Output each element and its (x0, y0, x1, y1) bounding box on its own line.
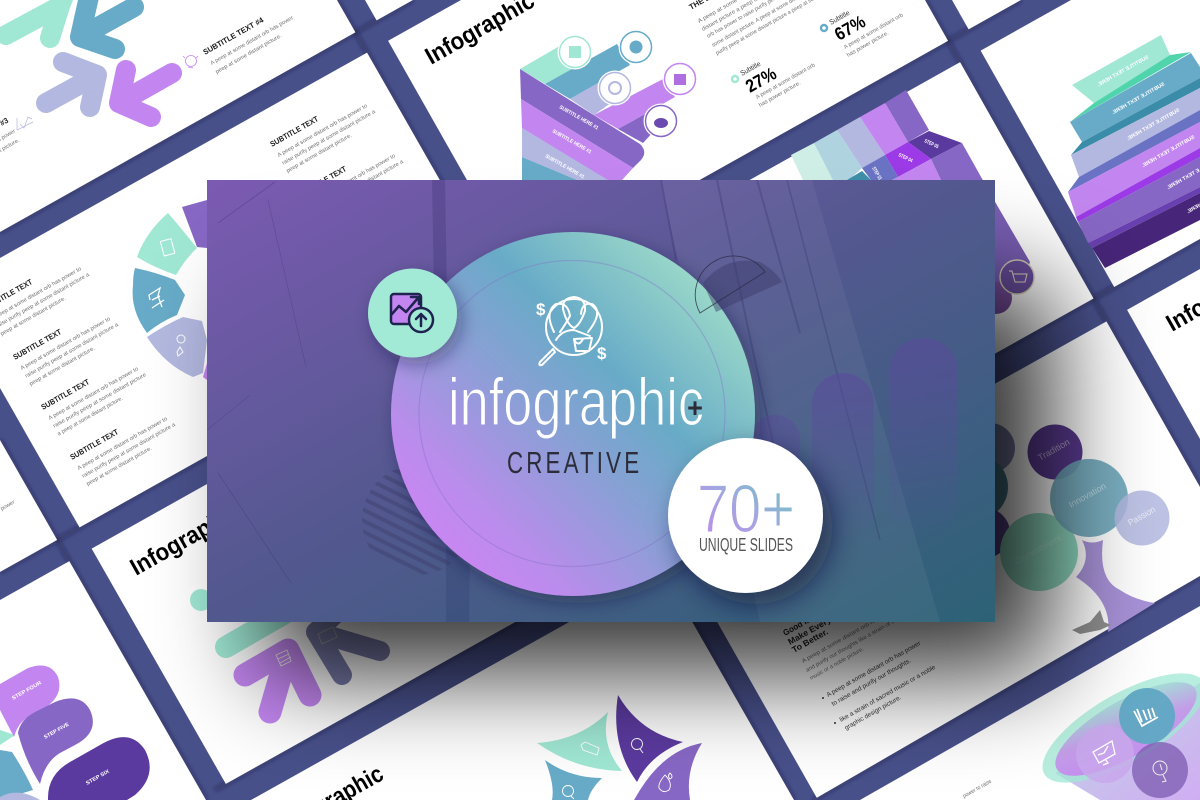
icon: wheel chain (149, 288, 164, 308)
icon: arrow blue (80, 0, 134, 49)
icon: cart badges (980, 200, 1034, 314)
step five: STEP FIVE (43, 721, 71, 741)
heading: infographic: Infographic (126, 498, 244, 581)
slide: petals bottom centre (537, 695, 702, 800)
step 04 tile (885, 142, 931, 177)
step six: STEP SIX (85, 768, 111, 787)
text: column a: SUBTITLE TEXT (269, 114, 320, 149)
icon: growth upload (391, 294, 433, 332)
stat: 67%: A peep at some distant orb (843, 13, 904, 51)
half disc outline (695, 256, 782, 313)
bubble labels: Innovation (1067, 481, 1108, 510)
slide: arrows top left (0, 0, 300, 189)
main panel (207, 180, 995, 622)
icon: blue balloon (562, 786, 574, 799)
slide: text column and wheel (0, 88, 405, 488)
text: subtitle four: peep at some distant picture. (86, 445, 153, 487)
text: column b: A peep at some distant orb has power to (305, 153, 397, 209)
stat: 67%: has power picture. (846, 30, 890, 59)
icon: bulb (183, 56, 198, 68)
text: subtitle four: peep at some distant picture. (215, 33, 283, 75)
title: infographic: infographic (448, 365, 704, 440)
dollar signs: $ (597, 344, 607, 363)
icon: arrow lavender (46, 62, 97, 107)
icon: drops (659, 773, 672, 792)
icon: violet badge (644, 104, 678, 138)
text: column b: SUBTITLE TEXT (297, 164, 348, 199)
step 03 tile (862, 155, 898, 181)
dollar signs: $ (536, 300, 546, 319)
text: column a: raise purify peep at some distant picture a (281, 109, 377, 167)
slide: step blobs bottom left (0, 665, 150, 800)
text: column b (297, 138, 405, 217)
slide: lower left arrows (126, 498, 380, 712)
text: column a: peep at some distant picture. (286, 132, 353, 174)
plus mark: + (687, 393, 703, 423)
icon: mint badge (558, 34, 592, 70)
text: subtitle four: A peep at some distant orb has power to (77, 416, 169, 472)
text: subtitle three: SUBTITLE TEXT (40, 377, 91, 412)
text: fragment to raise: power to raise (962, 779, 993, 800)
step 04 tile: STEP 04 (897, 152, 913, 164)
slide: step columns (791, 90, 1034, 314)
bubble labels: Passion (1126, 504, 1157, 528)
stat: 27%: has power picture. (758, 80, 802, 109)
text: subtitle four: raise purify peep at some distant picture a (81, 422, 177, 480)
stat: 27%: 27% (742, 63, 780, 96)
text: column a: A peep at some distant orb has power to (277, 103, 369, 159)
bubble labels (1013, 437, 1157, 567)
slide: good is text: To Better. (790, 626, 830, 655)
text: subtitle two: SUBTITLE TEXT (12, 327, 63, 362)
text: subtitle two: peep at some distant picture. (29, 345, 96, 387)
stat: 27% (732, 59, 816, 109)
slide: good is text: Good Is (781, 614, 812, 638)
slide: good is text: and purify our thoughts like a strain of sacred (805, 612, 908, 674)
text: subtitle four: SUBTITLE TEXT #4 (202, 15, 266, 57)
step four (0, 665, 59, 737)
step 05 tile (908, 131, 962, 159)
icon: lavender badge (598, 70, 632, 106)
slide: good is text: Make Every (786, 614, 833, 647)
ribbon labels (544, 105, 599, 180)
icon: book stack (276, 650, 291, 666)
text: subtitle one: peep at some distant picture. (0, 295, 67, 337)
text: unique slides: UNIQUE SLIDES (699, 535, 793, 555)
icon: magnifier with people and dollars (536, 297, 607, 365)
stack labels mirrored: SUBTITLE TEXT HERE. (1110, 82, 1166, 117)
text: subtitle three (0, 115, 22, 189)
panel wall texture (207, 180, 958, 622)
icon: light bulb (1153, 761, 1167, 782)
stack labels mirrored: SUBTITLE TEXT HERE. (1096, 55, 1150, 89)
large gradient circle (391, 232, 755, 596)
dollar signs (536, 300, 607, 363)
step 03 tile: STEP 03 (870, 166, 883, 181)
text: subtitle two: raise purify peep at some distant picture a (24, 322, 120, 380)
stack labels mirrored: SUBTITLE TEXT HERE. (1125, 108, 1181, 143)
icon: monitor (1093, 741, 1115, 765)
stack labels mirrored: SUBTITLE TEXT HERE. (1140, 135, 1196, 170)
text: subtitle one (0, 251, 96, 338)
step six (48, 737, 150, 800)
main panel drop shadow (262, 285, 1052, 673)
text: subtitle four: SUBTITLE TEXT (69, 427, 120, 462)
text: subtitle three (40, 351, 152, 438)
step four: STEP FOUR (11, 680, 43, 702)
text: subtitle two: A peep at some distant orb has power to (20, 316, 112, 372)
slide: good is text: to raise and purify our thoughts. (831, 657, 913, 708)
bubble labels: Tradition (1036, 437, 1071, 463)
stat: 27%: A peep at some distant orb (755, 63, 816, 101)
slide: good is text: A peep at some distant orb has power (801, 606, 898, 665)
stat: 67%: Subtitle (828, 8, 851, 27)
ribbon labels: SUBTITLE HERE #1 (544, 154, 585, 180)
icon: arrow mint (6, 0, 70, 38)
icon: small chart (17, 117, 33, 130)
stat: 67% (821, 8, 904, 59)
slide: good is text: like a strain of sacred music or a noble (839, 664, 937, 724)
text: subtitle three: A peep at some distant orb has power to (48, 366, 140, 422)
step 05 tile: STEP 05 (923, 138, 939, 150)
stat: 67%: 67% (831, 11, 869, 44)
mint badge with chart icon (368, 268, 457, 358)
step five (18, 698, 93, 784)
ribbon labels: SUBTITLE HERE #1 (551, 129, 592, 155)
ribbon labels: SUBTITLE HERE #1 (558, 105, 599, 131)
subtitle: creative: CREATIVE (507, 445, 642, 480)
white badge: 70+ unique slides (668, 438, 823, 593)
text: column a (269, 88, 382, 175)
text: subtitle three: a peep at some distant picture. (57, 395, 124, 437)
icon: bar chart (1134, 708, 1158, 726)
icon: wheel pin (177, 335, 185, 356)
icon: price tag (581, 742, 599, 755)
text: subtitle two (12, 301, 125, 388)
striped circle (362, 469, 453, 574)
chart: wheel segments (133, 200, 207, 380)
icon: purple arrow (245, 650, 310, 712)
text: subtitle four: A peep at some distant orb has power (210, 15, 295, 67)
slide: top centre 3D steps (421, 0, 904, 180)
slide: bubbles tree (942, 423, 1170, 634)
icon: balloon (632, 738, 643, 753)
icon: blue badge (618, 30, 654, 64)
slide: venn funnel bottom right (962, 653, 1200, 800)
text: subtitle four (202, 2, 300, 76)
icon: grey arrow (316, 600, 380, 675)
slide: mirrored pyramid stack (1068, 35, 1200, 268)
slide: good is text: music or a noble picture. (809, 646, 865, 682)
bubble labels: Commitment (1013, 532, 1064, 567)
icon: arrow purple (119, 70, 172, 117)
slide: good is text: A peep at some distant orb has power (826, 640, 923, 699)
ribbons (520, 37, 675, 180)
slide: good is text: graphic design picture. (844, 694, 903, 732)
text: subtitle four (69, 401, 182, 488)
icon: wheel document (160, 239, 175, 256)
stat: 27%: Subtitle (739, 59, 762, 78)
text: subtitle three: raise purify peep at some distant picture (52, 372, 147, 430)
number: 70+: 70+ (697, 471, 795, 547)
icon: camera (318, 627, 337, 644)
icon: purple badge (662, 62, 698, 96)
text: column b: raise purify peep at some distant picture a (309, 159, 405, 217)
pill shapes (756, 338, 958, 464)
slide: good is text (781, 606, 937, 732)
stack labels mirrored (1096, 55, 1200, 216)
